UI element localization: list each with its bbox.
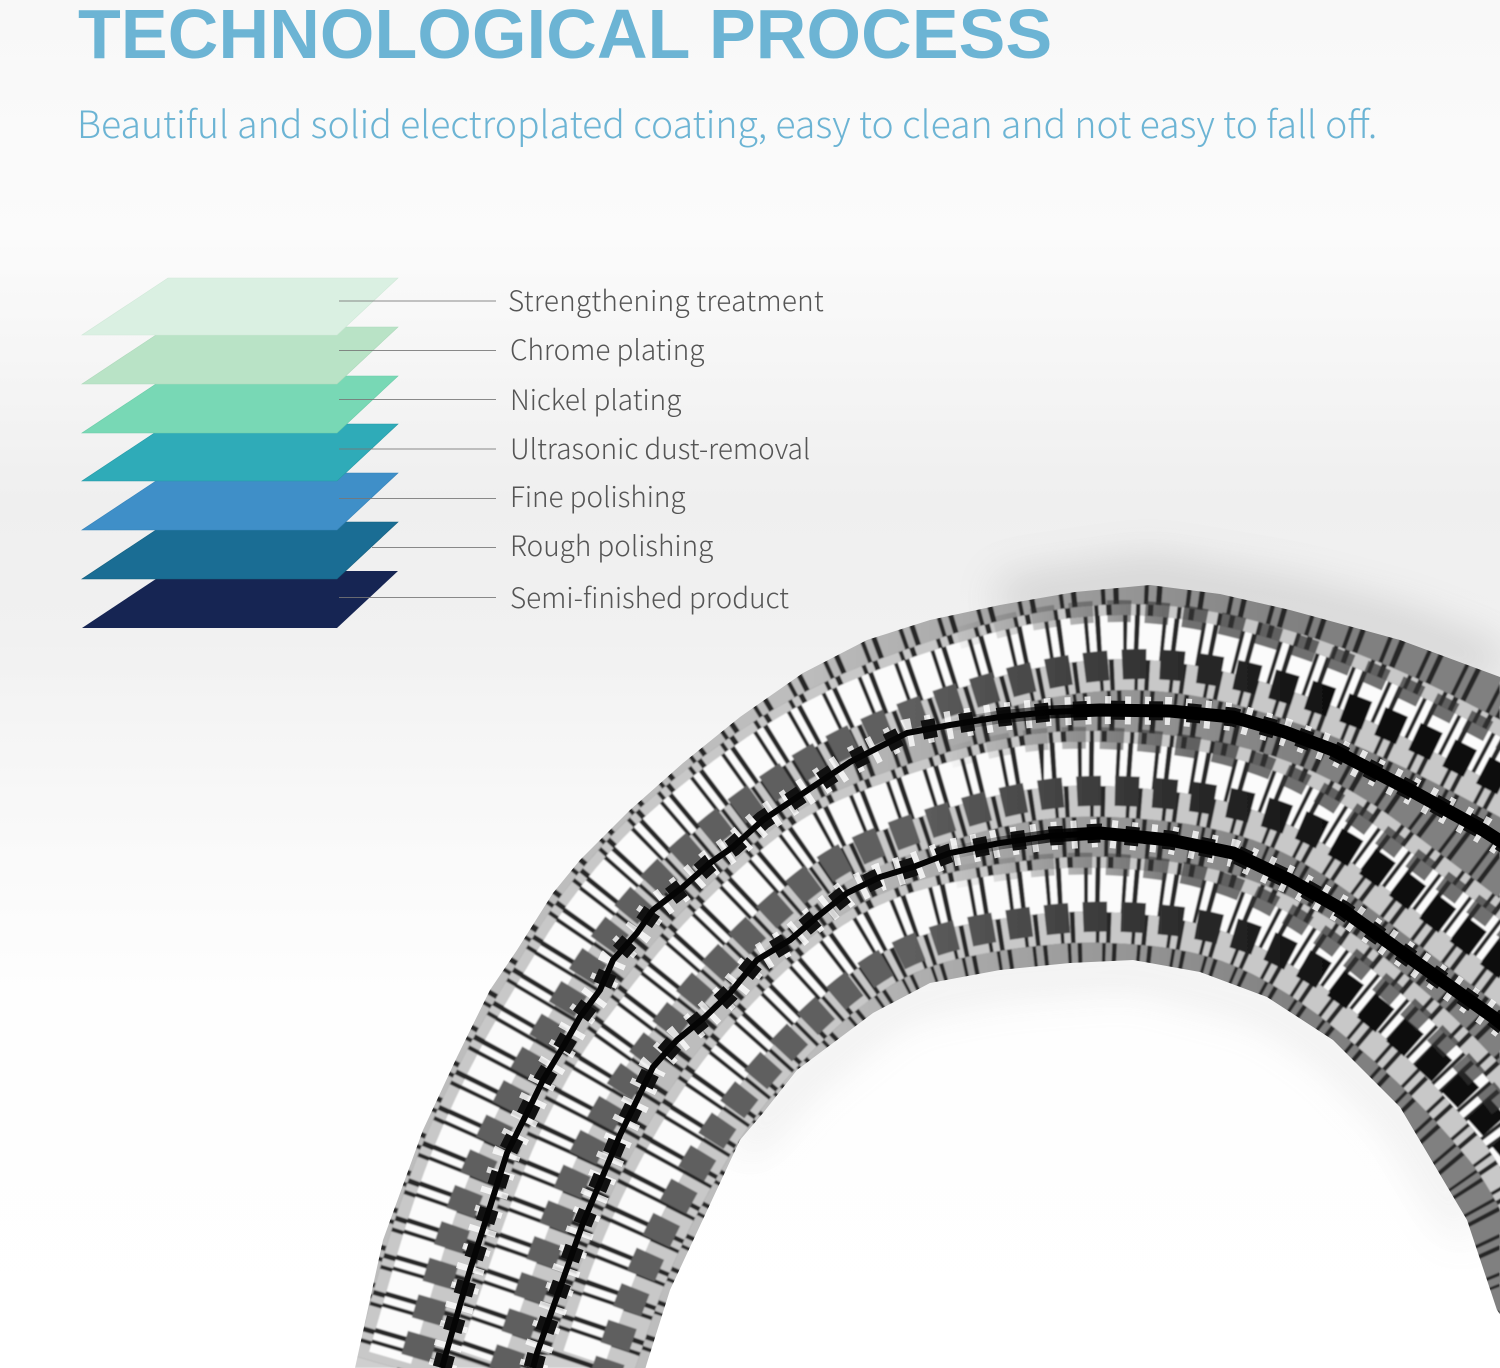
strand: outer hose coil	[340, 580, 1500, 1368]
layer: nickel plating	[82, 376, 398, 433]
label: Nickel plating	[510, 379, 681, 419]
layer: chrome plating	[82, 327, 398, 384]
label: Chrome plating	[510, 329, 704, 369]
layer: rough polishing	[82, 522, 398, 579]
label: Semi-finished product	[510, 577, 789, 617]
hose shadow	[740, 578, 1500, 1230]
layer: fine polishing	[82, 473, 398, 530]
layer: strengthening treatment	[82, 278, 398, 335]
label: Fine polishing	[510, 476, 686, 516]
label: Ultrasonic dust-removal	[510, 428, 810, 468]
layer: ultrasonic dust-removal	[82, 424, 398, 481]
coil separators with specular dots	[442, 710, 1500, 1368]
layer labels	[508, 280, 824, 617]
strand: inner hose coil	[540, 838, 1500, 1368]
label: Strengthening treatment	[508, 280, 824, 320]
layer stack diagram	[81, 278, 496, 628]
label: Rough polishing	[510, 525, 713, 565]
subtitle: Beautiful and solid electroplated coating, easy to clean and not easy to fall off.	[77, 95, 1377, 149]
leader lines	[339, 301, 496, 598]
hose photo illustration	[355, 546, 1500, 1368]
strand: middle hose coil	[448, 714, 1500, 1368]
layer: semi-finished product	[82, 571, 398, 628]
